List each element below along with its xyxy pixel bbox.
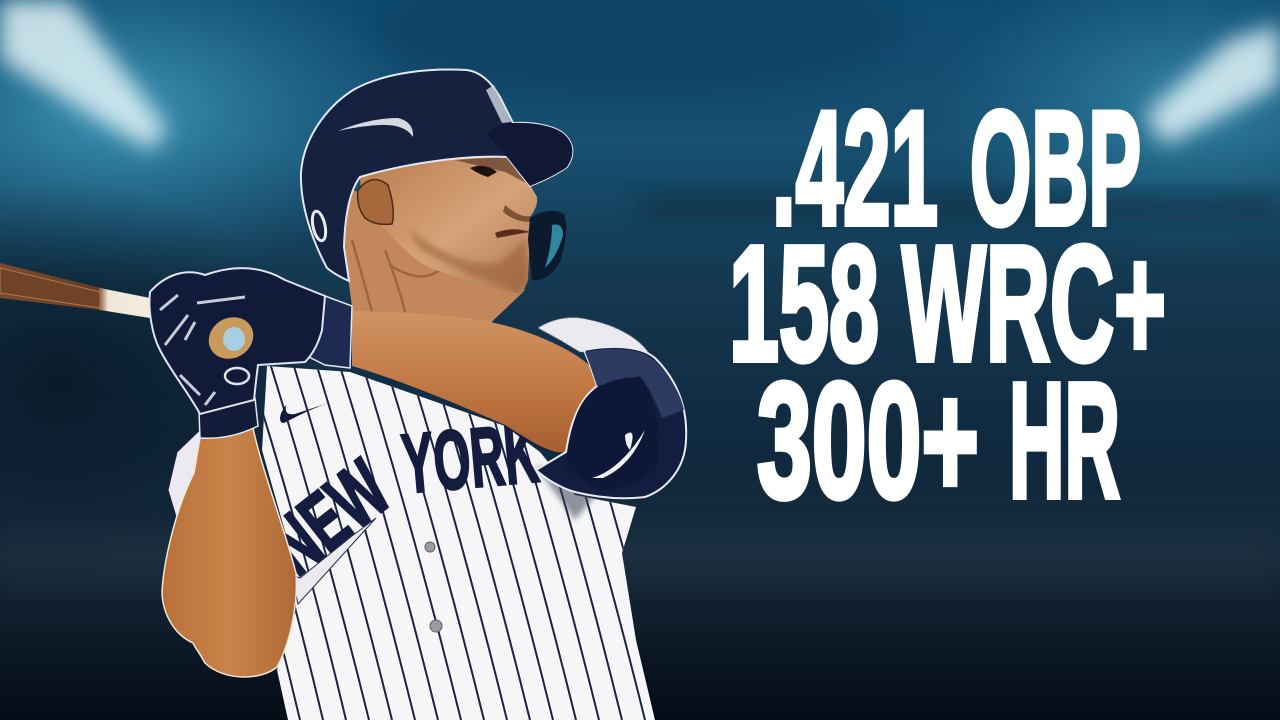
beard shading bbox=[408, 228, 528, 292]
gloved hands bbox=[149, 268, 325, 414]
jersey torso bbox=[262, 366, 655, 720]
nike logo on chest bbox=[280, 402, 331, 423]
glove highlights bbox=[160, 295, 245, 405]
head and face bbox=[358, 157, 537, 294]
shoulder jersey top bbox=[538, 318, 650, 355]
helmet highlight bbox=[338, 118, 413, 137]
wrist cuff, front hand bbox=[305, 296, 352, 368]
ear bbox=[358, 180, 393, 224]
pinstripes bbox=[264, 366, 646, 720]
neck bbox=[345, 190, 525, 324]
mouth guard bbox=[528, 211, 566, 280]
nose shadow bbox=[503, 205, 530, 222]
player bbox=[0, 70, 686, 720]
bat knob bbox=[201, 309, 261, 367]
rear jersey sleeve bbox=[168, 425, 230, 530]
bat barrel bbox=[0, 263, 150, 318]
elbow guard bbox=[536, 347, 686, 498]
jersey lettering: YORK: YORK bbox=[398, 405, 542, 511]
stat lines bbox=[729, 78, 1166, 532]
stat lines: HR bbox=[1009, 349, 1120, 532]
folded sleeve below lettering bbox=[292, 518, 376, 604]
stat: weighted runs created: 158 bbox=[729, 212, 879, 395]
stadium light: left bbox=[0, 0, 168, 150]
neck shading bbox=[352, 240, 440, 312]
batting gloves bbox=[149, 268, 352, 438]
eye bbox=[470, 166, 497, 177]
jersey lettering: NEW: NEW bbox=[252, 443, 407, 592]
glove logo bbox=[225, 368, 249, 384]
batting helmet bbox=[301, 70, 572, 281]
stat: home runs: 300+ bbox=[757, 349, 979, 532]
elbow guard logo bbox=[592, 430, 645, 478]
wrist cuff, rear hand bbox=[199, 398, 258, 438]
brow shadow bbox=[455, 157, 530, 185]
jersey buttons bbox=[425, 542, 442, 632]
mouth bbox=[495, 229, 530, 238]
jersey shadow bbox=[535, 465, 600, 520]
stat: on-base percentage: .421 bbox=[772, 78, 938, 259]
helmet ny logo bbox=[486, 85, 511, 123]
helmet brim bbox=[486, 123, 572, 186]
stat: weighted runs created bbox=[729, 212, 1166, 395]
helmet number bbox=[310, 210, 328, 242]
stadium light: right bbox=[1145, 25, 1280, 145]
front forearm bbox=[352, 311, 598, 452]
rear forearm bbox=[162, 428, 296, 677]
